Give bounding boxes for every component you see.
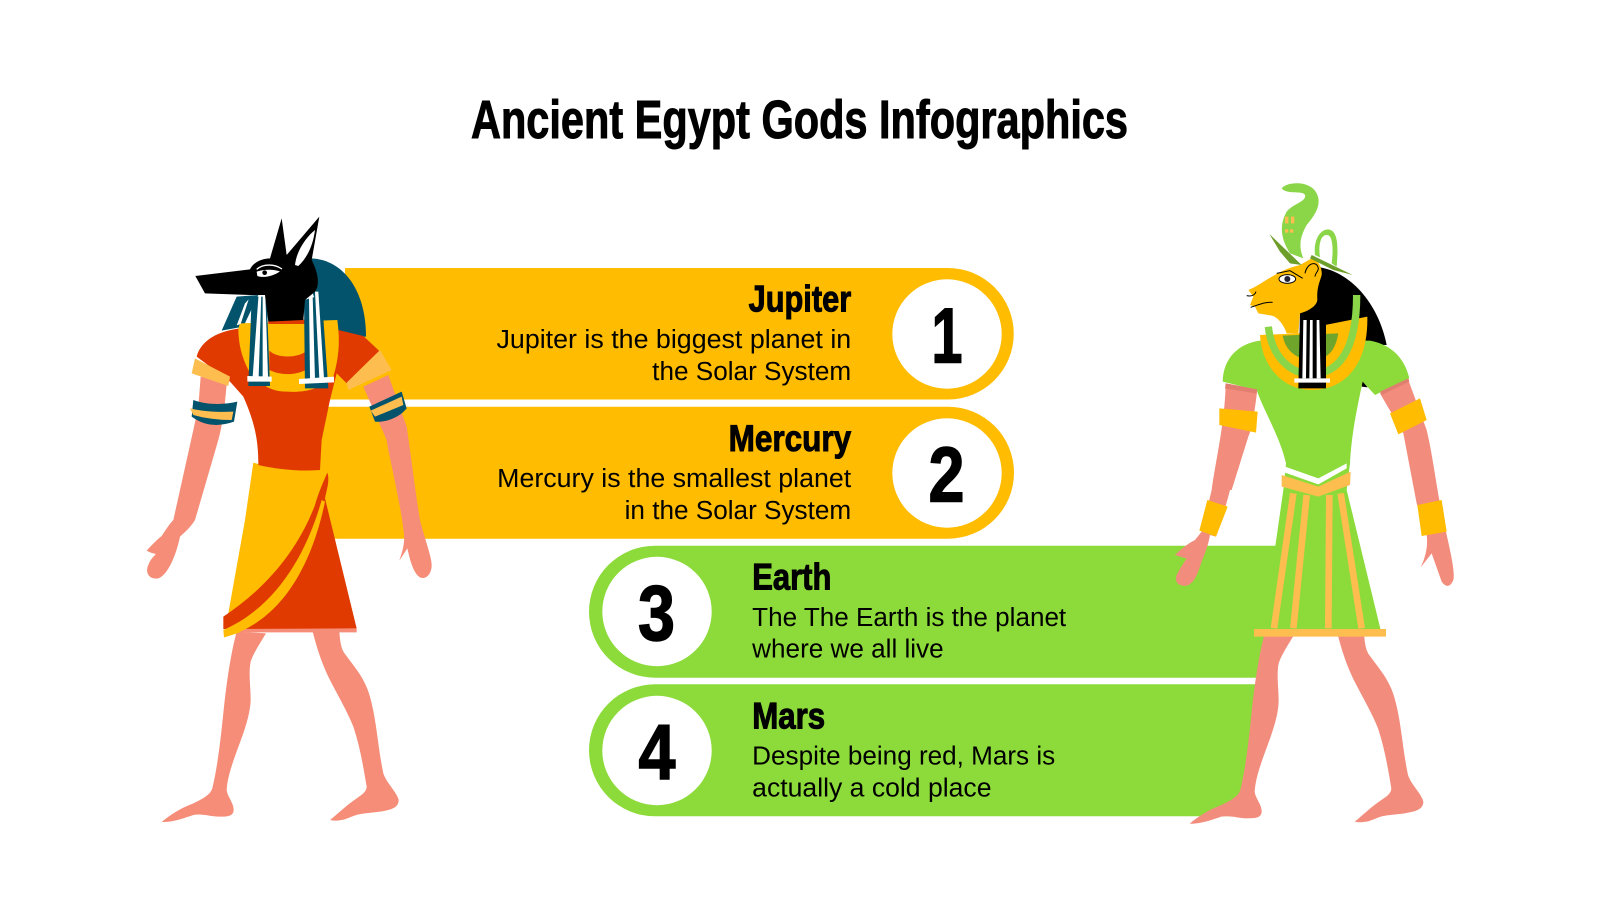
number badge 4 <box>602 696 712 805</box>
description: Jupiter <box>496 326 851 386</box>
description: Mars <box>752 743 1055 803</box>
heading: Mars: Mars <box>752 695 825 736</box>
number badge 2 <box>892 418 1002 528</box>
number badge 2: 2 <box>928 431 964 519</box>
heading: Earth: Earth <box>752 556 831 597</box>
panel: Mars <box>589 684 1265 816</box>
description: Mars: actually a cold place <box>752 775 992 803</box>
panel: Mercury <box>318 407 1014 539</box>
panel: Earth <box>589 546 1285 678</box>
title: Ancient Egypt Gods Infographics <box>471 90 1128 150</box>
icon: Anubis figure <box>147 217 432 822</box>
icon: lion-headed god figure <box>1175 183 1454 824</box>
number badge 4: 4 <box>638 708 676 796</box>
description: Earth: where we all live <box>751 636 944 664</box>
panel: Jupiter <box>320 268 1014 400</box>
heading: Jupiter: Jupiter <box>749 279 851 320</box>
description: Mars: Despite being red, Mars is <box>752 743 1055 771</box>
description: Mercury: Mercury is the smallest planet <box>497 465 851 493</box>
description: Earth: The The Earth is the planet <box>752 604 1066 632</box>
number badge 1: 1 <box>932 292 962 380</box>
number badge 3 <box>602 557 712 666</box>
description: Jupiter: Jupiter is the biggest planet in <box>496 326 851 354</box>
description: Mercury <box>497 465 851 525</box>
description: Earth <box>751 604 1066 664</box>
number badge 3: 3 <box>638 569 675 657</box>
description: Mercury: in the Solar System <box>625 497 851 525</box>
heading: Mercury: Mercury <box>729 418 852 459</box>
description: Jupiter: the Solar System <box>652 358 851 386</box>
number badge 1 <box>892 279 1002 389</box>
